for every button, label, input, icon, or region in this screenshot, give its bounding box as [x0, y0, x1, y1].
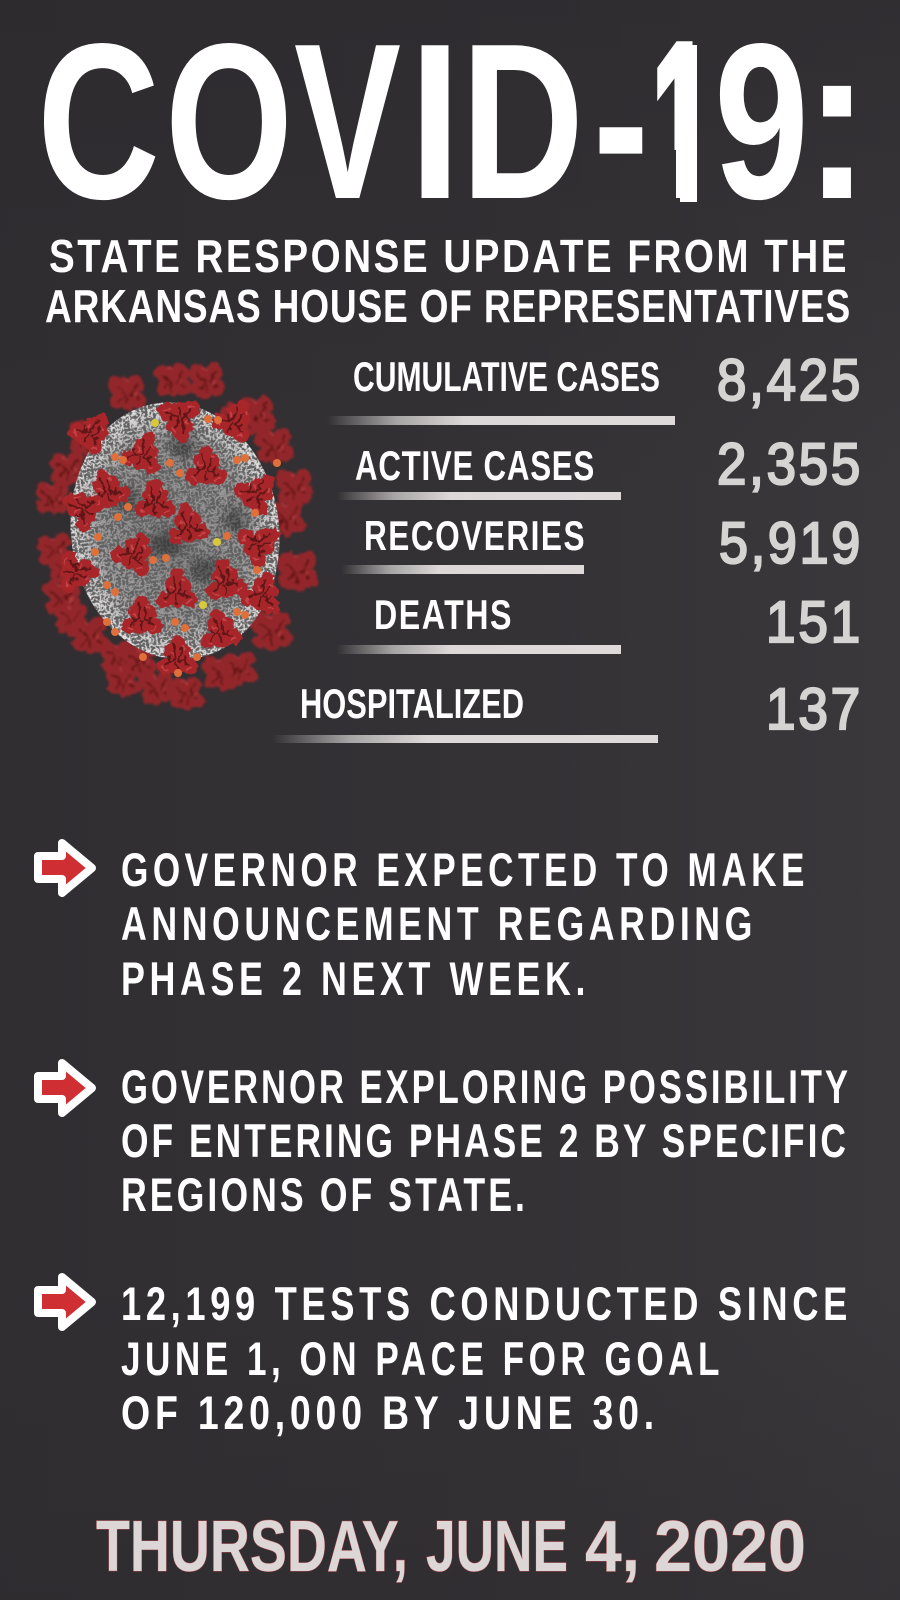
title: :	[804, 0, 870, 246]
title: C	[37, 0, 160, 246]
title: 9	[714, 0, 809, 246]
bullet text	[121, 843, 809, 1005]
stat: hospitalized: HOSPITALIZED	[300, 680, 524, 727]
bullet text	[121, 1060, 851, 1221]
stats panel	[273, 348, 863, 743]
title: -	[593, 0, 649, 246]
stat: active cases: 2,355	[717, 432, 863, 497]
title: I	[409, 0, 461, 246]
stat: deaths: DEATHS	[374, 591, 513, 638]
stat: recoveries	[342, 511, 863, 576]
outer spikes	[35, 363, 318, 711]
stat: deaths: 151	[766, 590, 863, 655]
stat: active cases: ACTIVE CASES	[355, 442, 595, 489]
orange and yellow dots	[91, 415, 281, 677]
stat: hospitalized	[273, 677, 863, 743]
icon: arrow	[38, 1277, 92, 1327]
date: 2020	[654, 1507, 806, 1587]
stat: recoveries: RECOVERIES	[364, 512, 586, 559]
date: JUNE	[426, 1507, 568, 1587]
stat: cumulative cases: CUMULATIVE CASES	[353, 353, 660, 400]
stat: cumulative cases: 8,425	[717, 348, 863, 413]
stat: active cases	[337, 432, 863, 500]
bullet text: PHASE 2 NEXT WEEK.	[121, 952, 590, 1005]
bullet: regional phase 2	[38, 1060, 851, 1221]
virus body	[54, 389, 296, 673]
title: V	[294, 0, 401, 246]
title: O	[165, 0, 293, 246]
bullet text	[121, 1277, 852, 1439]
icon: arrow	[38, 843, 92, 893]
stat: recoveries: 5,919	[719, 511, 863, 576]
bullet: phase 2 announcement	[38, 843, 809, 1005]
title: 1	[652, 0, 710, 246]
date: 4,	[585, 1507, 640, 1587]
stat: hospitalized: 137	[766, 677, 863, 742]
subtitle	[45, 230, 851, 332]
bullet text: OF 120,000 BY JUNE 30.	[121, 1386, 659, 1439]
stat: cumulative cases	[327, 348, 863, 425]
icon: coronavirus	[35, 363, 318, 711]
surface spikes	[53, 391, 290, 674]
stat: deaths	[337, 590, 863, 655]
title: D	[461, 0, 584, 246]
date: THURSDAY,	[96, 1507, 408, 1587]
dark surface patches	[111, 431, 245, 582]
icon: arrow	[38, 1063, 92, 1113]
bullet: tests conducted	[38, 1277, 852, 1439]
bullet text: REGIONS OF STATE.	[121, 1168, 528, 1221]
